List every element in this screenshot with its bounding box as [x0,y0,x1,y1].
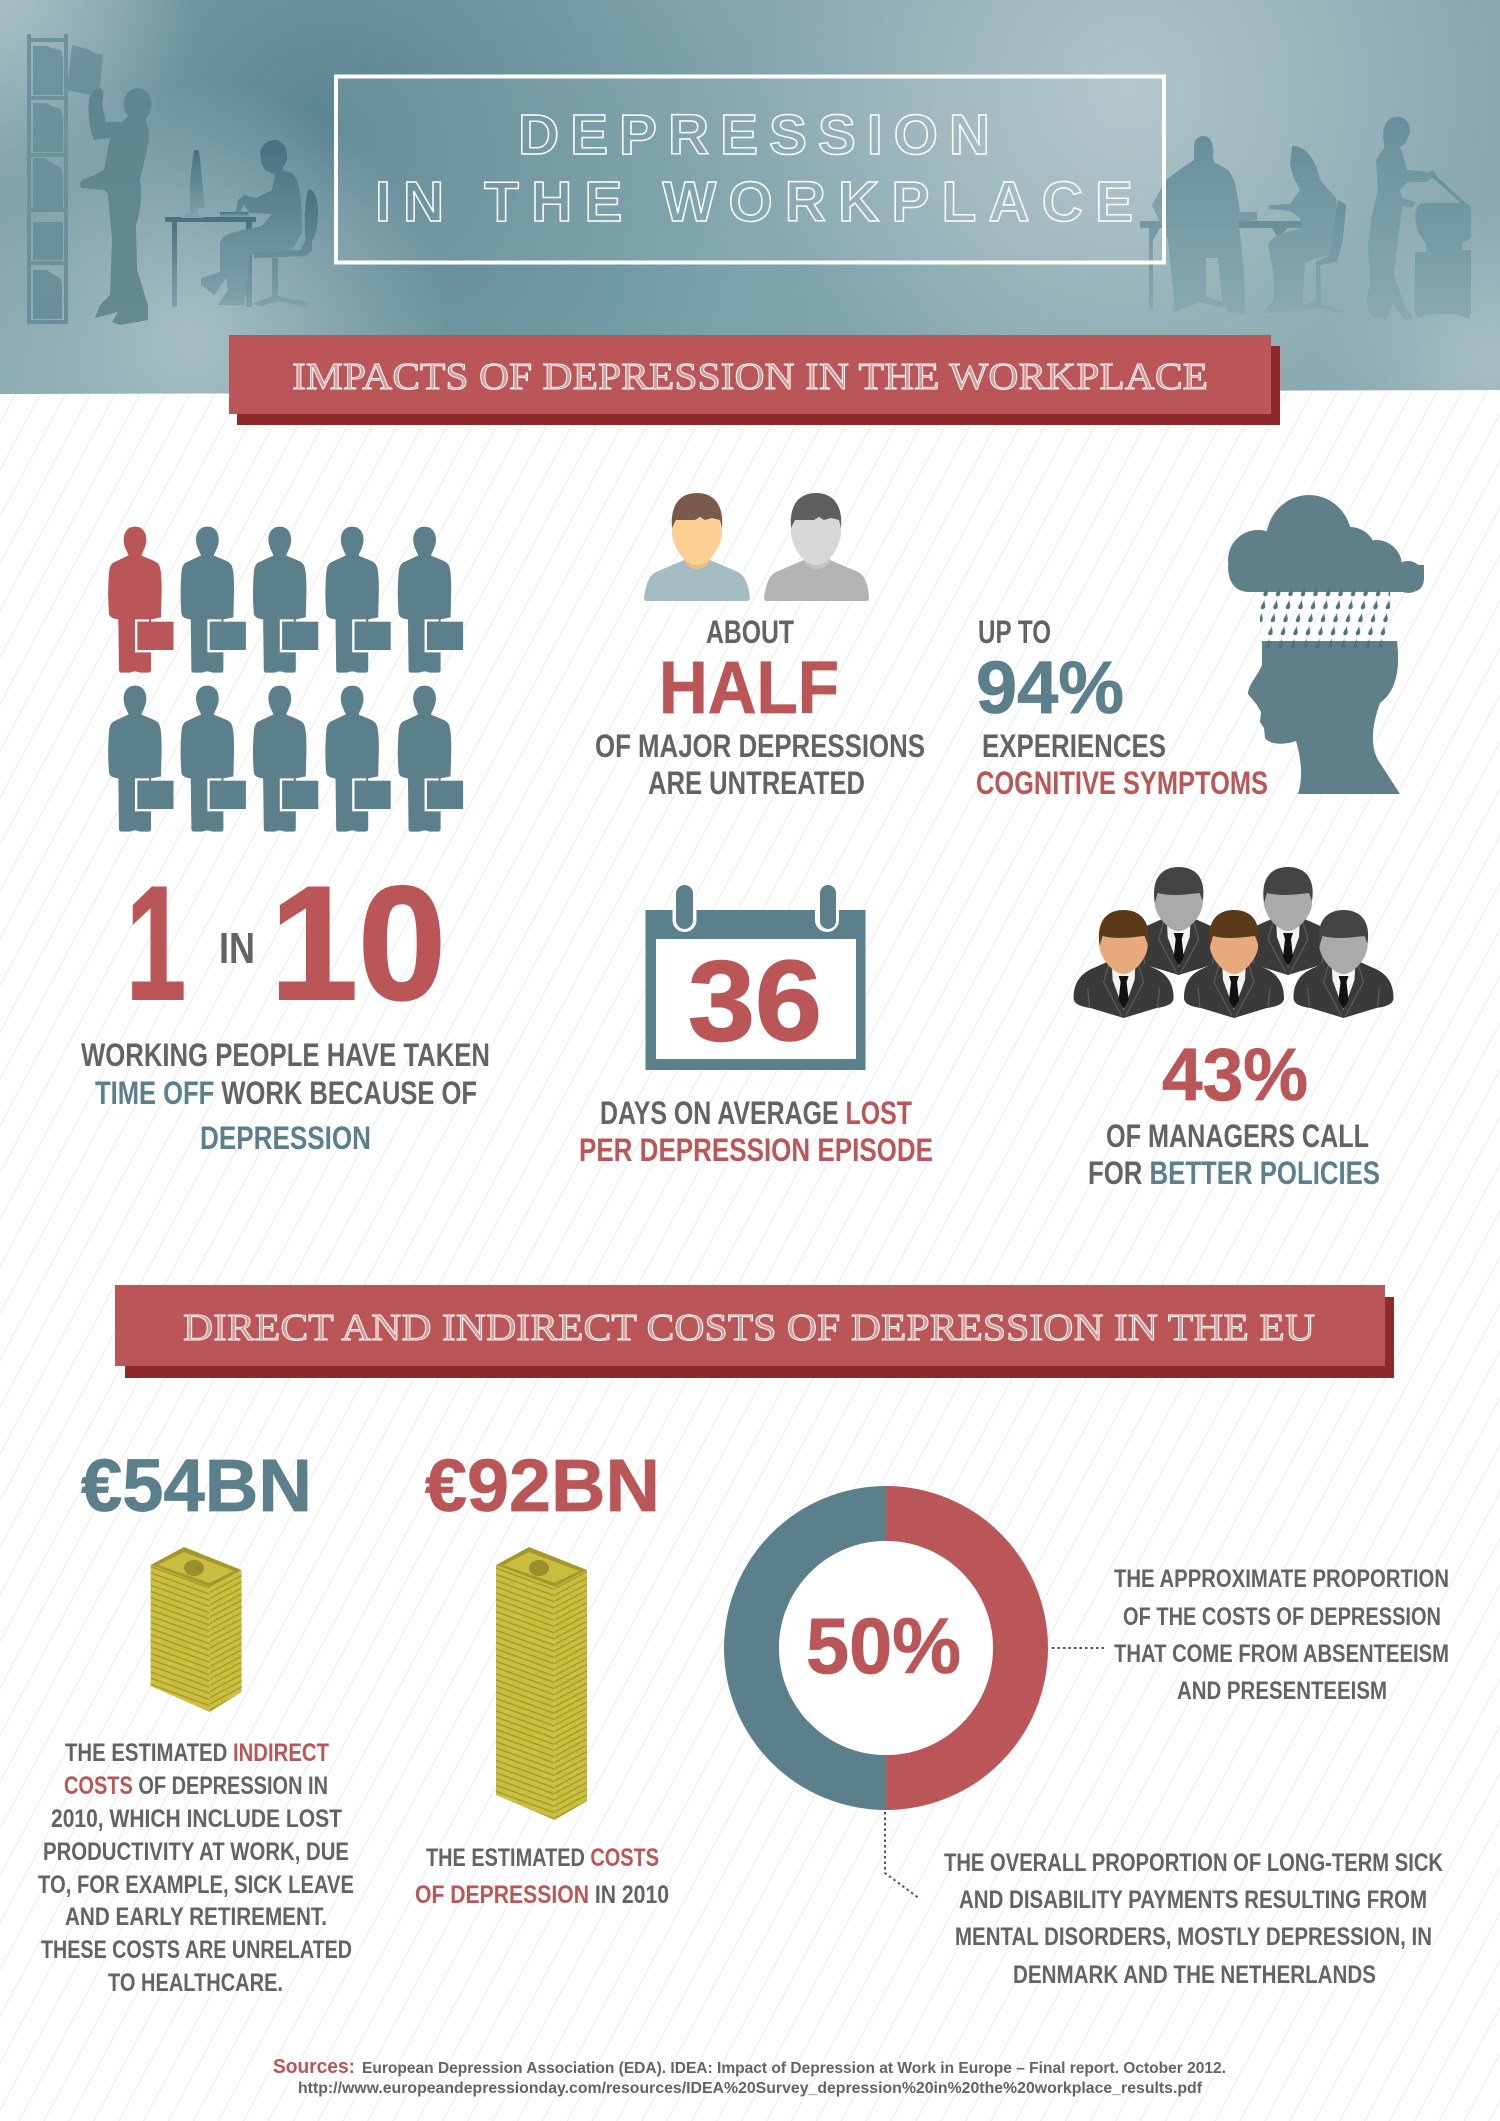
stat: days lost [579,1095,933,1168]
section banner: impacts: IMPACTS OF DEPRESSION IN THE WORKPLACE [292,356,1208,398]
text: indirect costs: THESE COSTS ARE UNRELATED [41,1936,352,1964]
illustration: worker at computer desk [165,140,318,308]
text: total costs: OF DEPRESSION IN 2010 [415,1881,669,1909]
stat: about half: ARE UNTREATED [648,765,865,801]
text: disability note [944,1849,1443,1989]
text: indirect costs: 2010, WHICH INCLUDE LOST [51,1805,342,1833]
stat: 1 in 10: IN [219,924,255,973]
stat: 1 in 10 [81,853,490,1156]
stat: 1 in 10: DEPRESSION [200,1120,371,1156]
stat: about half: HALF [659,646,839,729]
figure: 92bn: €92BN [425,1444,660,1527]
cloud [1228,495,1424,593]
title box [336,76,1164,262]
figure: 54bn: €54BN [81,1444,312,1527]
stat: 1 in 10: WORKING PEOPLE HAVE TAKEN [81,1037,490,1073]
text: indirect costs: TO, FOR EXAMPLE, SICK LEAVE [38,1871,354,1899]
text: absenteeism note: AND PRESENTEEISM [1177,1677,1387,1705]
text: indirect costs: COSTS OF DEPRESSION IN [64,1772,328,1800]
illustration: colleagues at meeting table [1140,136,1346,314]
head [1248,641,1400,794]
number: 36 [688,938,822,1065]
connector: dotted line to absenteeism note [1052,1647,1106,1649]
illustration: woman at photocopier [1366,117,1471,320]
text: indirect costs: PRODUCTIVITY AT WORK, DUE [43,1838,349,1866]
stat: about half: OF MAJOR DEPRESSIONS [595,728,925,764]
text: indirect costs: THE ESTIMATED INDIRECT [65,1739,329,1767]
text: absenteeism note [1114,1565,1449,1705]
stat: days lost: PER DEPRESSION EPISODE [579,1132,933,1168]
icon: small money stack [151,1547,242,1712]
stat: 1 in 10: 10 [270,853,446,1034]
sources [273,2056,1226,2097]
text: indirect costs: TO HEALTHCARE. [108,1969,283,1997]
stat: about half: ABOUT [706,614,794,650]
stat: 1 in 10: 1 [126,853,186,1034]
illustration: office worker at bookshelf [27,34,152,325]
stat: 43% of managers: 43% [1162,1033,1308,1116]
icon: tall money stack [496,1547,587,1820]
rain [1260,584,1390,650]
section banner: costs: DIRECT AND INDIRECT COSTS OF DEPRESSION IN THE EU [183,1307,1315,1349]
stat: days lost: DAYS ON AVERAGE LOST [600,1095,912,1131]
text: total costs: THE ESTIMATED COSTS [426,1844,659,1872]
donut chart: 50% [724,1486,1048,1810]
stat: 43% of managers: FOR BETTER POLICIES [1088,1155,1380,1191]
section banner: costs [115,1285,1394,1378]
stat: up to 94%: 94% [976,646,1124,729]
panel: 1 in 10 pictogram [108,527,463,832]
donut chart: 50%: 50% [806,1601,961,1690]
stat: up to 94%: EXPERIENCES [982,728,1166,764]
icon: head with rain cloud [1228,495,1424,794]
text: indirect costs [38,1739,354,1997]
text: total costs [415,1844,669,1909]
header band [0,0,1500,394]
title: line one: DEPRESSION [518,103,990,167]
stat: up to 94%: COGNITIVE SYMPTOMS [976,765,1268,801]
text: disability note: DENMARK AND THE NETHERLANDS [1013,1961,1376,1989]
icon: group of managers [1074,867,1394,1018]
stat: up to 94%: UP TO [978,614,1051,650]
stat: about half [595,614,925,801]
stat: up to 94% [976,614,1268,801]
connector: dotted line to disability note [885,1812,920,1899]
stat: 43% of managers: OF MANAGERS CALL [1106,1118,1369,1154]
title: line two: IN THE WORKPLACE [375,170,1133,234]
sources: Sources: [273,2056,355,2078]
stat: 43% of managers [1088,1033,1380,1191]
icon: two people [644,493,869,601]
sources: http://www.europeandepressionday.com/resources/IDEA%20Survey_depression%20in%20the%20workplace_results.pdf [298,2080,1203,2097]
icon: calendar [646,885,866,1070]
stat: 1 in 10: TIME OFF WORK BECAUSE OF [95,1075,477,1111]
section banner: impacts [229,335,1280,425]
sources: European Depression Association (EDA). IDEA: Impact of Depression at Work in Europe – Final report. October 2012. [362,2060,1226,2077]
text: indirect costs: AND EARLY RETIREMENT. [65,1903,327,1931]
